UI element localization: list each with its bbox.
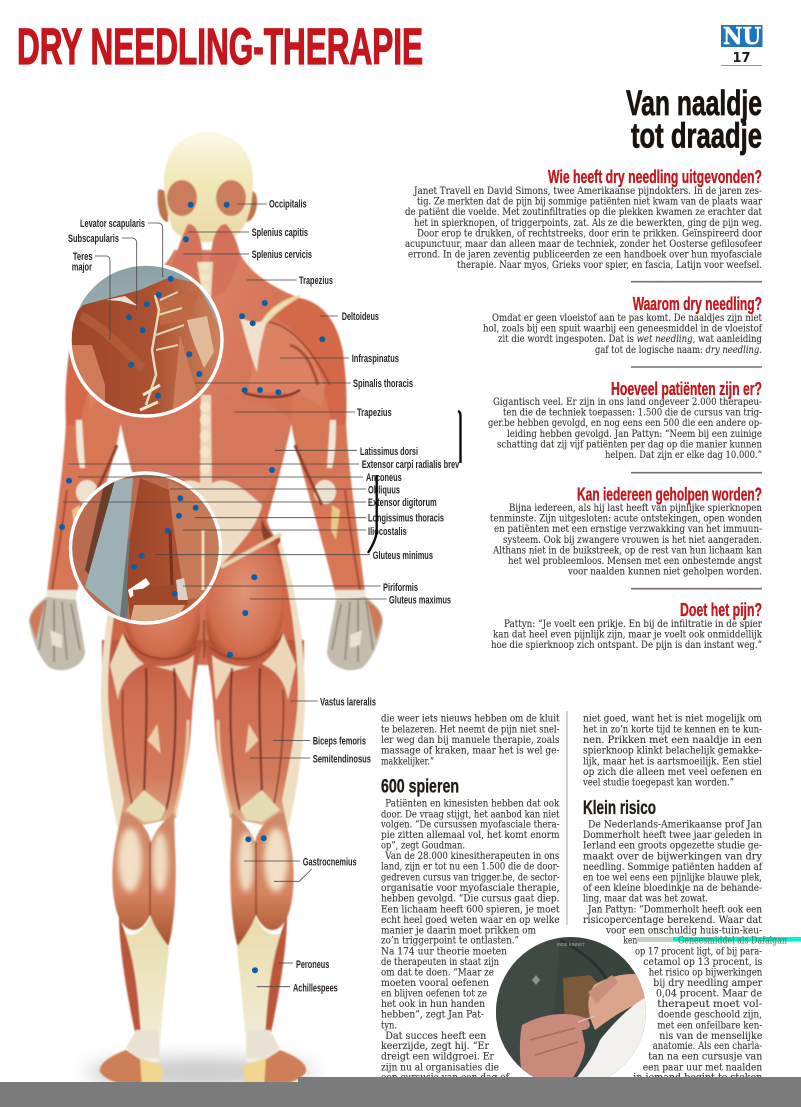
label: anconeus: Anconeus xyxy=(366,472,402,484)
label: infraspinatus: Infraspinatus xyxy=(352,353,399,365)
text block: hoeveel patienten zijn er: helpen. Dat zijn er elke dag 10.000.” xyxy=(605,449,762,461)
label: achillespees xyxy=(257,982,338,994)
article column 1: organisatie voor myofasciale therapie, xyxy=(381,882,560,894)
article column 2: nis van de menselijke xyxy=(659,1030,762,1042)
label: splenius capitis xyxy=(188,227,308,239)
article column 2: De Nederlands-Amerikaanse prof Jan xyxy=(588,818,762,830)
label: teres major: major xyxy=(72,262,92,274)
inset circle: shoulder blade muscles xyxy=(68,262,224,420)
label: trapezius lower: Trapezius xyxy=(357,407,392,419)
label: biceps femoris: Biceps femoris xyxy=(313,736,366,748)
label: teres major: Teres xyxy=(73,251,93,263)
article column 1: keerzijde, zegt hij. “Er xyxy=(381,1040,490,1052)
article column 2: veel studie toegepast kan worden.” xyxy=(582,777,734,789)
text block: waarom dry needling: zit die wordt ingespoten. Dat is wet needling, wat aanleiding xyxy=(498,333,762,345)
label: deltoideus: Deltoideus xyxy=(342,311,379,323)
article column 1: Na 174 uur theorie moeten xyxy=(381,945,507,957)
bottom gray band xyxy=(0,1077,801,1107)
label: occipitalis: Occipitalis xyxy=(269,199,307,211)
article column 1: dreigt een wildgroei. Er xyxy=(381,1051,495,1063)
text block: waarom dry needling xyxy=(483,294,763,356)
article column 2: spierknoop klinkt belachelijk gemakke- xyxy=(583,745,762,757)
label: latissimus dorsi: Latissimus dorsi xyxy=(360,446,418,458)
article column 2: en toe wel eens een pijnlijke blauwe plek, xyxy=(583,872,762,884)
text block: kan iedereen geholpen worden xyxy=(490,485,763,578)
article column 2: cetamol op 13 procent, is xyxy=(643,956,762,968)
article column 2: het risico op bijwerkingen xyxy=(649,966,762,978)
needling point markers xyxy=(59,202,325,973)
label: splenius capitis: Splenius capitis xyxy=(252,227,308,239)
label: gluteus maximus: Gluteus maximus xyxy=(389,594,451,606)
label: subscapularis: Subscapularis xyxy=(68,233,119,245)
article column 2: ling, maar dat was het zowat. xyxy=(583,893,708,905)
article column 2: lijk, maar het is aartsmoeilijk. Een stiel xyxy=(583,755,763,767)
label: subscapularis xyxy=(68,233,137,310)
article column 2: met een onfeilbare ken- xyxy=(657,1019,763,1031)
article column 2: maakt over de bijwerkingen van dry xyxy=(583,850,762,862)
article column 1: pie zitten allemaal vol, het komt enorm xyxy=(381,829,560,841)
text block: doet het pijn xyxy=(491,600,763,651)
article column 1: om dat te doen. “Maar ze xyxy=(381,966,494,978)
label: gastrocnemius xyxy=(244,856,357,881)
article column 1: Van de 28.000 kinesitherapeuten in ons xyxy=(384,850,559,862)
label: peroneus: Peroneus xyxy=(296,959,329,971)
label: infraspinatus xyxy=(280,353,399,365)
text block: kan iedereen geholpen worden: voor naalden kunnen niet geholpen worden. xyxy=(567,566,762,578)
newspaper logo and page number: 17 xyxy=(732,51,750,66)
article column 1 xyxy=(380,713,560,1084)
label: occipitalis xyxy=(237,199,307,211)
article column 1: het ook in hun handen xyxy=(381,998,485,1010)
article column 2: risicopercentage berekend. Waar dat xyxy=(583,914,763,926)
label: biceps femoris xyxy=(273,736,366,748)
article column 1: zijn nu al organisaties die xyxy=(381,1061,499,1073)
article column 1: hebben gevolgd. “Die cursus gaat diep. xyxy=(381,893,560,905)
heading: 600 spieren: 600 spieren xyxy=(381,777,459,798)
heading: van naaldje tot draadje xyxy=(626,84,762,156)
article column 1: tyn. xyxy=(381,1019,397,1031)
article column 2: nen. Prikken met een naaldje in een xyxy=(583,734,762,746)
article column 2: op zich die alleen met veel oefenen en xyxy=(583,766,762,778)
label: piriformis: Piriformis xyxy=(383,582,418,594)
article column 1: de therapeuten in staat zijn xyxy=(381,956,499,968)
text block: wie heeft dry needling uitgevonden xyxy=(405,167,763,271)
article column 2: Jan Pattyn: “Dommerholt heeft ook een xyxy=(587,903,762,915)
article column 2: of een kleine bloedinkje na de behande- xyxy=(583,882,762,894)
text block: hoeveel patienten zijn er xyxy=(488,379,762,461)
label: trapezius upper xyxy=(247,275,333,287)
article column 2: in iemand begint te steken xyxy=(633,1072,763,1084)
label: longissimus thoracis: Longissimus thoracis xyxy=(368,512,444,524)
article column 2: Dommerholt heeft twee jaar geleden in xyxy=(583,829,762,841)
article column 2: voor een onschuldig huis-tuin-keu- xyxy=(605,925,762,937)
article column 2: op 17 procent ligt, of bij para- xyxy=(635,945,762,957)
article column 1: Een lichaam heeft 600 spieren, je moet xyxy=(381,903,560,915)
article column 1: zo’n triggerpoint te ontlasten.” xyxy=(381,935,519,947)
article column 2: bij dry needling amper xyxy=(653,977,763,989)
article column 1: Dat succes heeft een xyxy=(385,1030,487,1042)
article column 1: ler weg dan bij manuele therapie, zoals xyxy=(381,734,560,746)
article column 1: moeten vooral oefenen xyxy=(381,977,489,989)
round photo: therapist needling a patient: INDE KINNET xyxy=(557,942,585,947)
heading: klein risico: Klein risico xyxy=(583,798,656,819)
article column 1: echt heel goed weten waar en op welke xyxy=(381,914,560,926)
inset circle: deep lower back and gluteal muscles xyxy=(68,472,224,626)
label: spinalis thoracis: Spinalis thoracis xyxy=(353,378,413,390)
article column 2: needling. Sommige patiënten hadden af xyxy=(583,861,763,873)
article column 1: op”, zegt Goudman. xyxy=(381,840,465,852)
article column 1: die weer iets nieuws hebben om de kluit xyxy=(381,713,560,725)
article column 1: door. De vraag stijgt, het aanbod kan niet xyxy=(381,808,560,820)
article column 2 xyxy=(582,713,763,1084)
article column 2: tan na een cursusje van xyxy=(648,1051,763,1063)
article column 2: niet goed, want het is niet mogelijk om xyxy=(583,713,762,725)
article column 1: en blijven oefenen tot ze xyxy=(381,988,487,1000)
stray black bracket marks xyxy=(368,411,460,553)
article column 1: makkelijker.” xyxy=(381,755,434,767)
title: DRY NEEDLING-THERAPIE xyxy=(17,18,423,75)
text block: doet het pijn: Doet het pijn? xyxy=(680,600,762,620)
label: obliquus: Obliquus xyxy=(368,484,400,496)
article column 1: volgen. “De cursussen myofasciale thera- xyxy=(380,819,560,831)
label: levator scapularis xyxy=(80,218,163,277)
label: extensor digitorum: Extensor digitorum xyxy=(368,497,437,509)
label: vastus lateralis xyxy=(291,696,376,708)
label: gluteus minimus: Gluteus minimus xyxy=(373,550,433,562)
label: deltoideus xyxy=(320,311,379,323)
article column 1: Patiënten en kinesisten hebben dat ook xyxy=(385,798,560,810)
text block: waarom dry needling: gaf tot de logische naam: dry needling. xyxy=(595,344,762,356)
article column 2: doende geschoold zijn, xyxy=(658,1009,762,1021)
article column 1: land, zijn er tot nu een 1.500 die de door- xyxy=(381,861,560,873)
label: vastus lateralis: Vastus lareralis xyxy=(320,696,376,708)
label: gastrocnemius: Gastrocnemius xyxy=(303,856,357,868)
article column 1: een cursusje van een dag of xyxy=(381,1072,510,1084)
article column 2: ken xyxy=(623,935,637,947)
label: semitendinosus: Semitendinosus xyxy=(313,754,371,766)
round photo: therapist needling a patient xyxy=(496,937,646,1077)
column divider xyxy=(566,711,568,925)
article column 2: therapeut moet vol- xyxy=(657,998,763,1010)
label: extensor carpi radialis brevis: Extensor carpi radialis brev xyxy=(362,459,460,471)
article column 1: gedreven cursus van trigger.be, de sector- xyxy=(381,871,560,883)
label: peroneus xyxy=(278,959,329,971)
label: achillespees: Achillespees xyxy=(293,982,338,994)
label: splenius cervicis: Splenius cervicis xyxy=(252,249,312,261)
article column 2: 0,04 procent. Maar de xyxy=(656,988,762,1000)
label: trapezius upper: Trapezius xyxy=(299,275,333,287)
anatomical figure: back view with muscles xyxy=(29,132,383,1088)
label: iliocostalis: Iliocostalis xyxy=(368,526,407,538)
label: teres major xyxy=(72,251,110,340)
label: semitendinosus xyxy=(250,754,371,766)
newspaper logo and page number: NU xyxy=(723,23,761,50)
article column 1: manier je daarin moet prikken om xyxy=(381,925,536,937)
article column 2: het in zo’n korte tijd te kennen en te kun- xyxy=(583,723,762,735)
muscle labels with leader lines xyxy=(63,199,460,994)
article column 1: te belazeren. Het neemt de pijn niet snel- xyxy=(381,723,560,735)
article column 1: massage of kraken, maar het is wel ge- xyxy=(381,745,560,757)
article column 2: Ierland een groots opgezette studie ge- xyxy=(583,840,762,852)
label: splenius cervicis xyxy=(183,249,312,261)
article column 2: anatomie. Als een charla- xyxy=(653,1040,763,1052)
newspaper logo and page number xyxy=(721,23,762,66)
label: levator scapularis: Levator scapularis xyxy=(80,218,145,230)
article column 1: hebben”, zegt Jan Pat- xyxy=(381,1009,484,1021)
article column 2: een paar uur met naalden xyxy=(643,1061,763,1073)
